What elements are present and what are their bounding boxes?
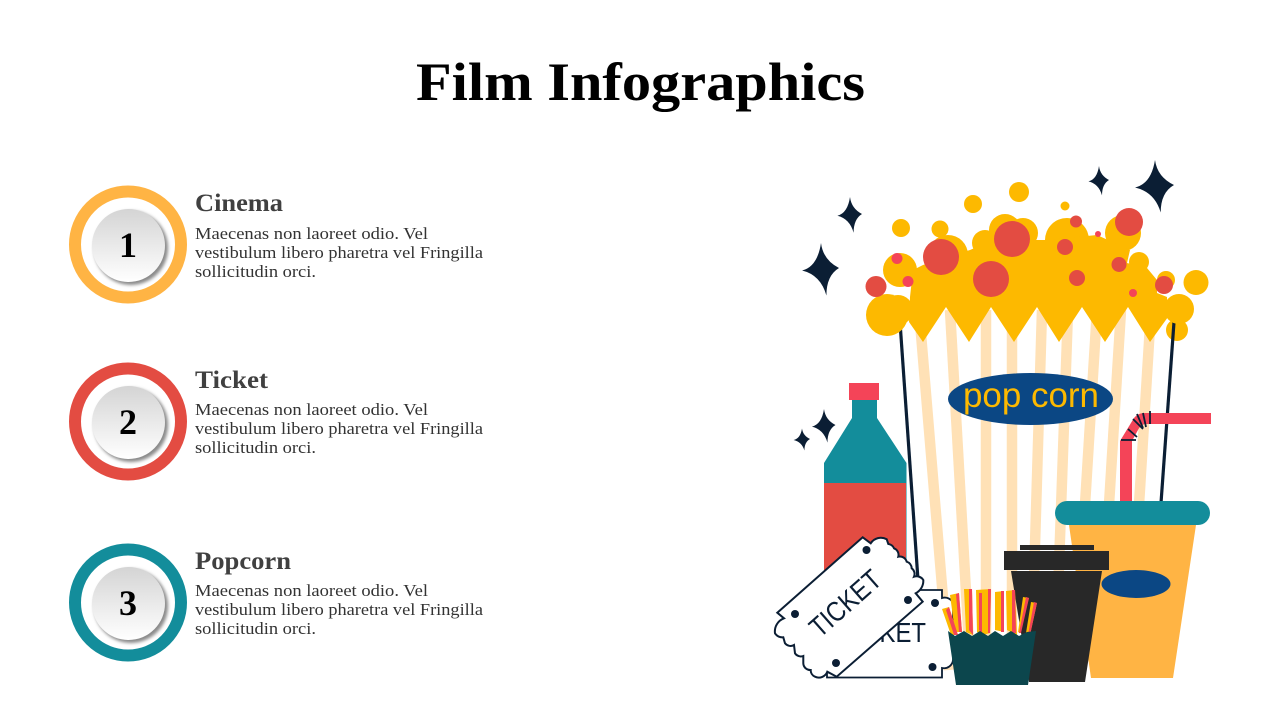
badge 2: [75, 368, 181, 474]
title: Film Infographics: [416, 52, 865, 112]
item: Ticket: [75, 367, 483, 474]
text: Cinema description: sollicitudin orci.: [195, 262, 316, 281]
text: Popcorn description: [195, 581, 483, 638]
lower right kernel behind box edge: [1166, 319, 1188, 341]
back ticket: [827, 590, 953, 678]
text: Popcorn description: sollicitudin orci.: [195, 619, 316, 638]
text: Ticket description: vestibulum libero pharetra vel Fringilla: [195, 419, 483, 438]
fries: [942, 589, 1037, 685]
badge 2: 2: [119, 402, 137, 442]
pop corn label: [948, 373, 1113, 425]
text: Ticket description: sollicitudin orci.: [195, 438, 316, 457]
bottle: [824, 383, 906, 620]
item: Popcorn: [75, 548, 483, 656]
popcorn red spots: [866, 208, 1173, 297]
fries box: [948, 631, 1036, 685]
item: Cinema: [75, 190, 483, 298]
straw: [1120, 411, 1211, 502]
back ticket: TICKET: [841, 617, 926, 648]
text: Cinema description: vestibulum libero pharetra vel Fringilla: [195, 243, 483, 262]
badge 3: [75, 550, 181, 656]
soda cup: [1055, 501, 1210, 678]
coffee cup: [1004, 545, 1109, 682]
popcorn pink spots: [892, 231, 1137, 297]
sparkle stars: [794, 160, 1174, 451]
badge 1: [75, 192, 181, 298]
text: Popcorn description: vestibulum libero pharetra vel Fringilla: [195, 600, 483, 619]
text: Ticket description: Maecenas non laoreet odio. Vel: [195, 400, 428, 419]
front ticket: TICKET: [803, 564, 887, 643]
front ticket: [775, 537, 923, 678]
text: Popcorn description: Maecenas non laoreet odio. Vel: [195, 581, 428, 600]
popcorn box edges: [900, 322, 1174, 580]
badge 3: 3: [119, 583, 137, 623]
text: Cinema description: Maecenas non laoreet odio. Vel: [195, 224, 428, 243]
illustration: cinema snacks: [775, 160, 1211, 685]
heading: Ticket: Ticket: [195, 367, 269, 394]
heading: Popcorn: Popcorn: [195, 548, 291, 575]
text: Cinema description: [195, 224, 483, 281]
badge 1: 1: [119, 225, 137, 265]
text: Ticket description: [195, 400, 483, 457]
pop corn label: pop corn: [963, 376, 1099, 415]
heading: Cinema: Cinema: [195, 190, 284, 217]
soda cup label: [1102, 570, 1170, 598]
popcorn box stripes: [919, 310, 1151, 680]
popcorn kernels: [866, 182, 1208, 342]
